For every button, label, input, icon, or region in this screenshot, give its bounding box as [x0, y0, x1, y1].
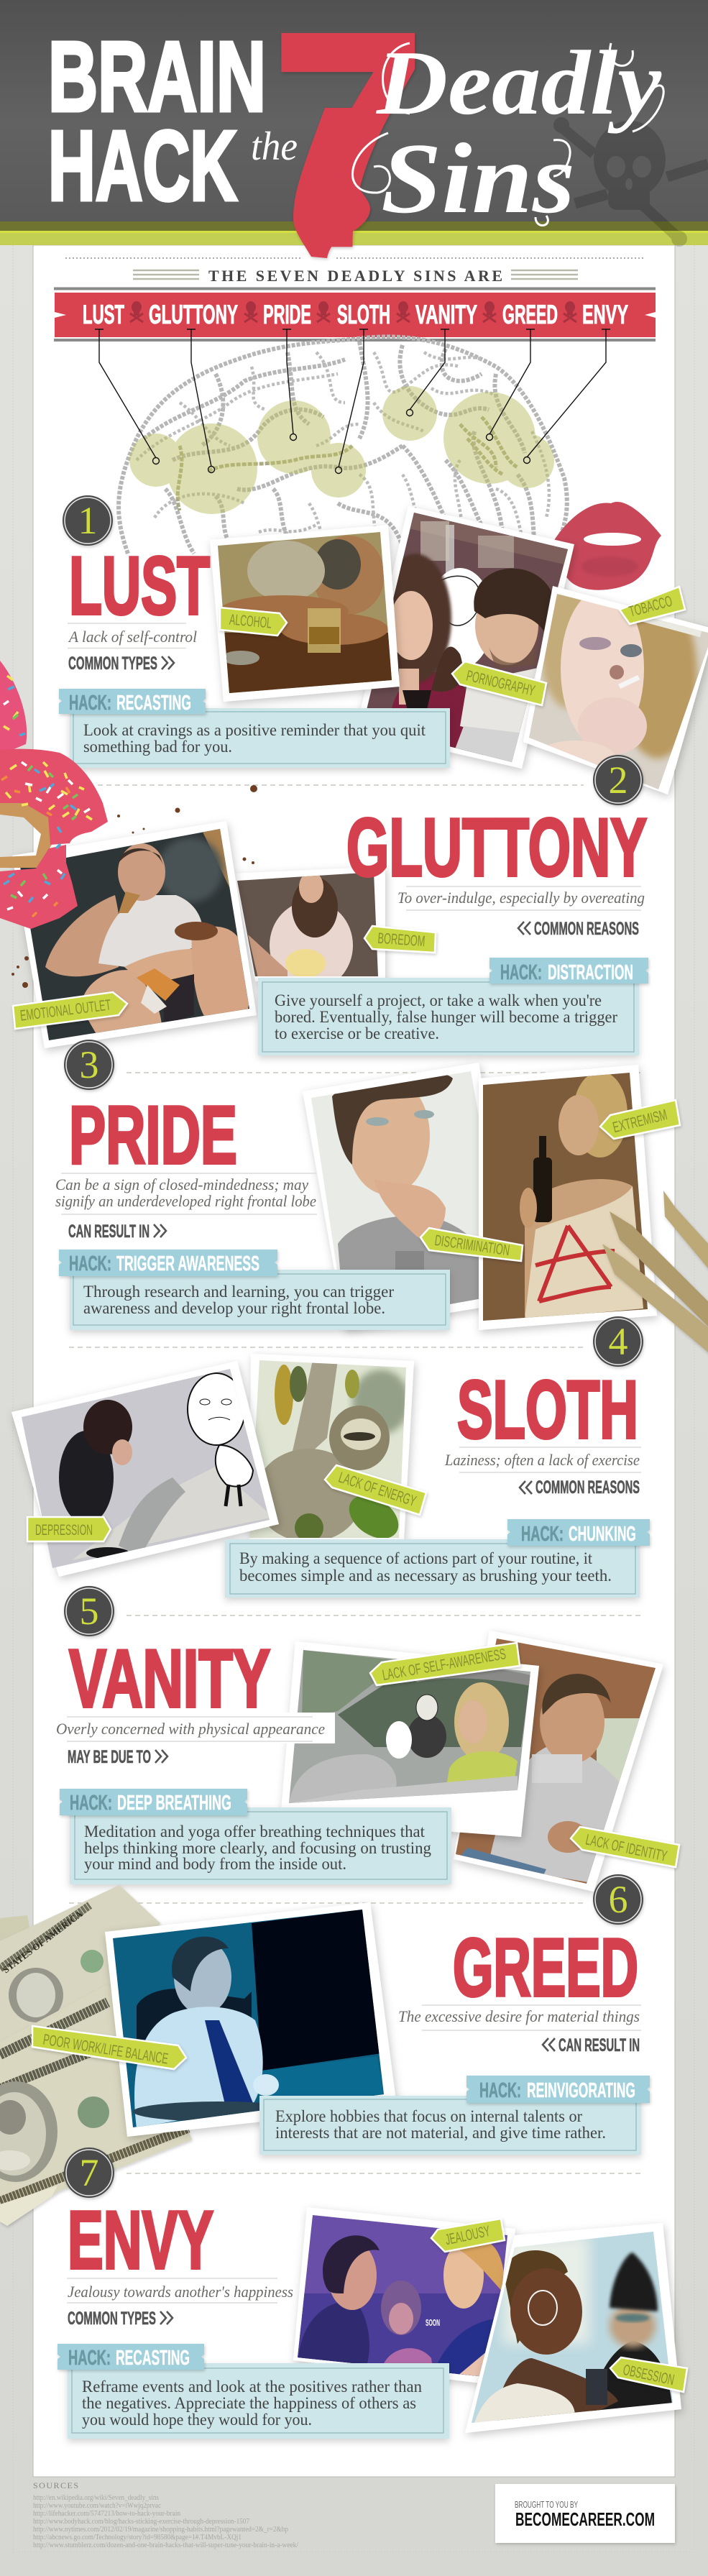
badge 7 — [64, 2148, 114, 2198]
can result in label — [543, 2035, 640, 2055]
sloth hack box: By making a sequence of actions part of your routine, it — [239, 1549, 593, 1567]
title: Deadly Sins: Sins — [381, 123, 575, 234]
badge 4 — [593, 1316, 643, 1367]
section 5: vanity — [50, 1631, 679, 1892]
pride hack tag — [59, 1250, 277, 1276]
ribbon with sin names: GREED — [502, 300, 558, 329]
section 4: sloth — [7, 1354, 650, 1598]
label: jealousy — [431, 2219, 505, 2252]
divider — [69, 1347, 584, 1348]
icon: bullets — [602, 1191, 708, 1355]
pride hack box: Through research and learning, you can trigger — [83, 1283, 394, 1301]
vanity photo: woman in car — [280, 1641, 539, 1837]
pride description: signify an underdeveloped right frontal lobe — [55, 1192, 316, 1210]
label: depression: DEPRESSION — [35, 1522, 93, 1539]
label: pornography: PORNOGRAPHY — [465, 668, 536, 700]
connector lines from names to brain regions — [95, 329, 610, 473]
label: lack of self-awareness — [370, 1643, 520, 1685]
gluttony hack tag: DISTRACTION — [548, 961, 633, 984]
label: alcohol — [220, 608, 287, 636]
dotted line under header — [65, 257, 645, 259]
sources: SOURCES — [33, 2480, 78, 2490]
lust photo: woman smoking — [518, 582, 708, 798]
pride hack box: awareness and develop your right frontal lobe. — [83, 1299, 385, 1317]
common reasons label: COMMON REASONS — [534, 919, 639, 939]
label: emotional outlet — [13, 992, 127, 1029]
label: depression — [27, 1517, 111, 1541]
vanity description: Overly concerned with physical appearance — [56, 1720, 325, 1738]
sources — [33, 2480, 298, 2549]
greed hack tag — [466, 2076, 650, 2103]
greed description: The excessive desire for material things — [398, 2007, 640, 2025]
title: Deadly Sins — [352, 32, 663, 234]
title: BRAIN HACK: HACK — [48, 111, 237, 221]
envy photo: couple and jealous woman: SOON — [426, 2317, 440, 2328]
title: envy: ENVY — [68, 2195, 213, 2286]
gluttony hack tag — [489, 958, 648, 984]
badge 1: 1 — [78, 499, 98, 542]
common reasons label: COMMON REASONS — [535, 1477, 640, 1498]
section 1: lust — [59, 485, 708, 798]
ribbon with sin names: PRIDE — [263, 300, 311, 329]
sources: http://www.nytimes.com/2012/02/19/magazine/shopping-habits.html?pagewanted=2&_r=2&hp — [33, 2526, 288, 2534]
badge 2: 2 — [608, 758, 628, 802]
heading: the seven deadly sins are — [133, 267, 578, 285]
vanity hack box — [70, 1807, 451, 1884]
pride photo: woman with bottle — [478, 1065, 657, 1330]
vanity hack tag — [60, 1789, 247, 1815]
label: extremism — [600, 1100, 680, 1139]
badge 3: 3 — [79, 1043, 99, 1086]
brought to you by logo box — [495, 2484, 675, 2543]
label: tobacco — [620, 587, 685, 624]
ribbon with sin names: VANITY — [415, 300, 477, 329]
sloth hack tag: CHUNKING — [569, 1523, 636, 1546]
envy hack box: the negatives. Appreciate the happiness of others as — [82, 2394, 416, 2412]
header — [0, 0, 708, 245]
brought to you by logo box: BROUGHT TO YOU BY — [515, 2499, 578, 2510]
ribbon with sin names — [54, 288, 656, 342]
gluttony photo: man eating pizza — [12, 821, 257, 1048]
divider — [69, 1902, 584, 1904]
skull eye sockets — [607, 156, 651, 190]
vanity hack box: helps thinking more clearly, and focusing on trusting — [84, 1839, 431, 1857]
lust hack box — [70, 708, 450, 768]
envy hack tag — [58, 2344, 204, 2370]
title: Deadly Sins: Deadly — [376, 32, 662, 134]
pride hack box — [70, 1270, 450, 1330]
sources: http://www.youtube.com/watch?v=iWwjq2prvac — [33, 2502, 162, 2510]
common types label: COMMON TYPES — [68, 654, 157, 674]
heading: the seven deadly sins are: THE SEVEN DEADLY SINS ARE — [208, 267, 502, 285]
label: discrimination — [420, 1228, 523, 1261]
lust photo: couple surprised — [359, 506, 578, 774]
sources: http://www.bodyhack.com/blog/hacks-sticking-exercise-through-depression-1507 — [33, 2518, 249, 2526]
section 2: gluttony — [12, 802, 648, 1055]
ribbon with sin names: LUST — [83, 300, 124, 329]
label: pornography — [452, 661, 546, 705]
label: tobacco: TOBACCO — [627, 593, 674, 620]
sources: http://en.wikipedia.org/wiki/Seven_deadly_sins — [33, 2494, 159, 2502]
brain illustration — [119, 336, 567, 561]
vanity hack box: Meditation and yoga offer breathing techniques that — [84, 1823, 426, 1841]
white content panel — [33, 245, 675, 2477]
pride description — [55, 1175, 316, 1210]
sloth hack box — [225, 1539, 640, 1598]
sloth hack tag — [507, 1519, 650, 1546]
icon: dollar bills — [0, 1885, 192, 2226]
label: obsession — [610, 2357, 687, 2392]
vanity photo: young man in hoodie — [453, 1631, 663, 1892]
gluttony hack box: bored. Eventually, false hunger will become a trigger — [275, 1008, 617, 1026]
sloth hack tag: HACK: — [521, 1523, 564, 1546]
lust hack tag: RECASTING — [116, 692, 191, 715]
envy hack box: Reframe events and look at the positives rather than — [82, 2378, 422, 2396]
can result in label: CAN RESULT IN — [68, 1221, 150, 1242]
badge 1 — [63, 495, 113, 546]
highlighted brain regions — [129, 386, 554, 514]
lust hack box: something bad for you. — [83, 738, 232, 756]
envy photo: woman watched by man — [465, 2223, 681, 2433]
badge 6: 6 — [608, 1878, 628, 1921]
vanity hack box: your mind and body from the inside out. — [84, 1855, 346, 1873]
lust hack box: Look at cravings as a positive reminder that you quit — [83, 721, 426, 739]
gluttony hack box: to exercise or be creative. — [275, 1025, 439, 1042]
label: poor work/life balance: POOR WORK/LIFE BALANCE — [42, 2031, 170, 2068]
envy photo: couple and jealous woman — [293, 2207, 515, 2385]
envy description: Jealousy towards another's happiness — [68, 2283, 293, 2301]
icon: skull and crossbones watermark — [553, 117, 708, 247]
badge 6 — [593, 1874, 643, 1925]
label: alcohol: ALCOHOL — [229, 611, 272, 632]
sloth photo: sloth in tree — [248, 1354, 414, 1547]
label: poor work/life balance — [32, 2026, 186, 2069]
greed photo: man at computer — [105, 1902, 397, 2137]
white backing behind vanity description — [50, 1713, 335, 1743]
vanity hack tag: HACK: — [70, 1792, 112, 1815]
greed hack tag: HACK: — [479, 2079, 521, 2102]
gluttony photo: woman with popcorn — [230, 866, 388, 990]
sources: http://www.stumblerz.com/dozen-and-one-brain-hacks-that-will-super-tune-your-brain-in-a-week/ — [33, 2541, 298, 2549]
ribbon with sin names: ENVY — [582, 300, 628, 329]
title: lust: LUST — [69, 541, 210, 632]
label: lack of self-awareness: LACK OF SELF-AWARENESS — [381, 1646, 507, 1684]
label: boredom — [364, 926, 436, 953]
lust photo: man with whisky — [208, 525, 403, 705]
label: lack of energy — [325, 1465, 426, 1515]
section 3: pride — [55, 1063, 708, 1355]
icon: dollar bills: STATES OF AMERICA — [1, 1908, 85, 1975]
envy hack box — [68, 2363, 449, 2439]
lust hack tag: HACK: — [69, 692, 111, 715]
lust hack tag — [59, 689, 206, 715]
divider — [127, 1072, 641, 1073]
badge 5 — [64, 1586, 114, 1636]
icon: lipstick kiss — [551, 502, 661, 590]
sloth hack box: becomes simple and as necessary as brushing your teeth. — [239, 1567, 612, 1585]
pride hack tag: HACK: — [69, 1252, 111, 1275]
section 6: greed — [32, 1902, 650, 2155]
divider — [98, 784, 584, 786]
label: lack of energy: LACK OF ENERGY — [336, 1470, 418, 1510]
lust description: A lack of self-control — [68, 628, 197, 646]
common types label: COMMON TYPES — [68, 2309, 156, 2329]
gluttony hack tag: HACK: — [500, 961, 542, 984]
ribbon with sin names: GLUTTONY — [149, 300, 238, 329]
envy hack box: you would hope they would for you. — [82, 2411, 312, 2429]
badge 2 — [593, 755, 643, 805]
can result in label: CAN RESULT IN — [558, 2035, 640, 2055]
label: lack of identity — [571, 1827, 679, 1867]
title: pride: PRIDE — [69, 1090, 237, 1181]
pride description: Can be a sign of closed-mindedness; may — [55, 1175, 308, 1193]
sources: http://abcnews.go.com/Technology/story?id=98580&page=1#.T4MvbL-XQj1 — [33, 2534, 242, 2541]
label: jealousy: JEALOUSY — [443, 2223, 492, 2248]
ribbon with sin names: SLOTH — [337, 300, 390, 329]
label: emotional outlet: EMOTIONAL OUTLET — [19, 996, 112, 1025]
sources: http://lifehacker.com/5747213/how-to-hack-your-brain — [33, 2510, 180, 2518]
title: BRAIN HACK — [48, 22, 266, 221]
greed hack tag: REINVIGORATING — [527, 2079, 635, 2102]
gluttony description: To over-indulge, especially by overeating — [397, 889, 645, 907]
envy hack tag: HACK: — [68, 2347, 111, 2370]
greed hack box — [259, 2096, 641, 2155]
badge 3 — [64, 1040, 114, 1090]
label: discrimination: DISCRIMINATION — [433, 1232, 510, 1259]
gluttony hack box — [258, 978, 639, 1055]
pride photo: thoughtful man — [300, 1063, 487, 1336]
greed hack box: interests that are not material, and give time rather. — [275, 2124, 606, 2142]
sloth photo: depressed girl — [7, 1359, 280, 1582]
badge 5: 5 — [79, 1590, 99, 1633]
gluttony hack box: Give yourself a project, or take a walk when you're — [275, 991, 602, 1009]
title: the: the — [251, 124, 298, 169]
vanity hack tag: DEEP BREATHING — [117, 1792, 231, 1815]
greed hack box: Explore hobbies that focus on internal talents or — [275, 2107, 582, 2125]
label: extremism: EXTREMISM — [611, 1106, 669, 1136]
badge 4: 4 — [608, 1320, 628, 1363]
title: vanity: VANITY — [69, 1633, 270, 1725]
sloth description: Laziness; often a lack of exercise — [444, 1451, 640, 1469]
section 7: envy — [58, 2195, 687, 2439]
title: BRAIN HACK: BRAIN — [48, 22, 266, 132]
common reasons label — [520, 1477, 640, 1498]
pride hack tag: TRIGGER AWARENESS — [116, 1252, 259, 1275]
common reasons label — [518, 919, 639, 939]
divider — [127, 2173, 641, 2174]
envy hack tag: RECASTING — [116, 2347, 190, 2370]
divider — [127, 1615, 641, 1616]
label: boredom: BOREDOM — [377, 930, 426, 950]
badge 7: 7 — [79, 2151, 99, 2194]
may be due to label: MAY BE DUE TO — [68, 1747, 151, 1767]
icon: donuts — [0, 661, 257, 988]
